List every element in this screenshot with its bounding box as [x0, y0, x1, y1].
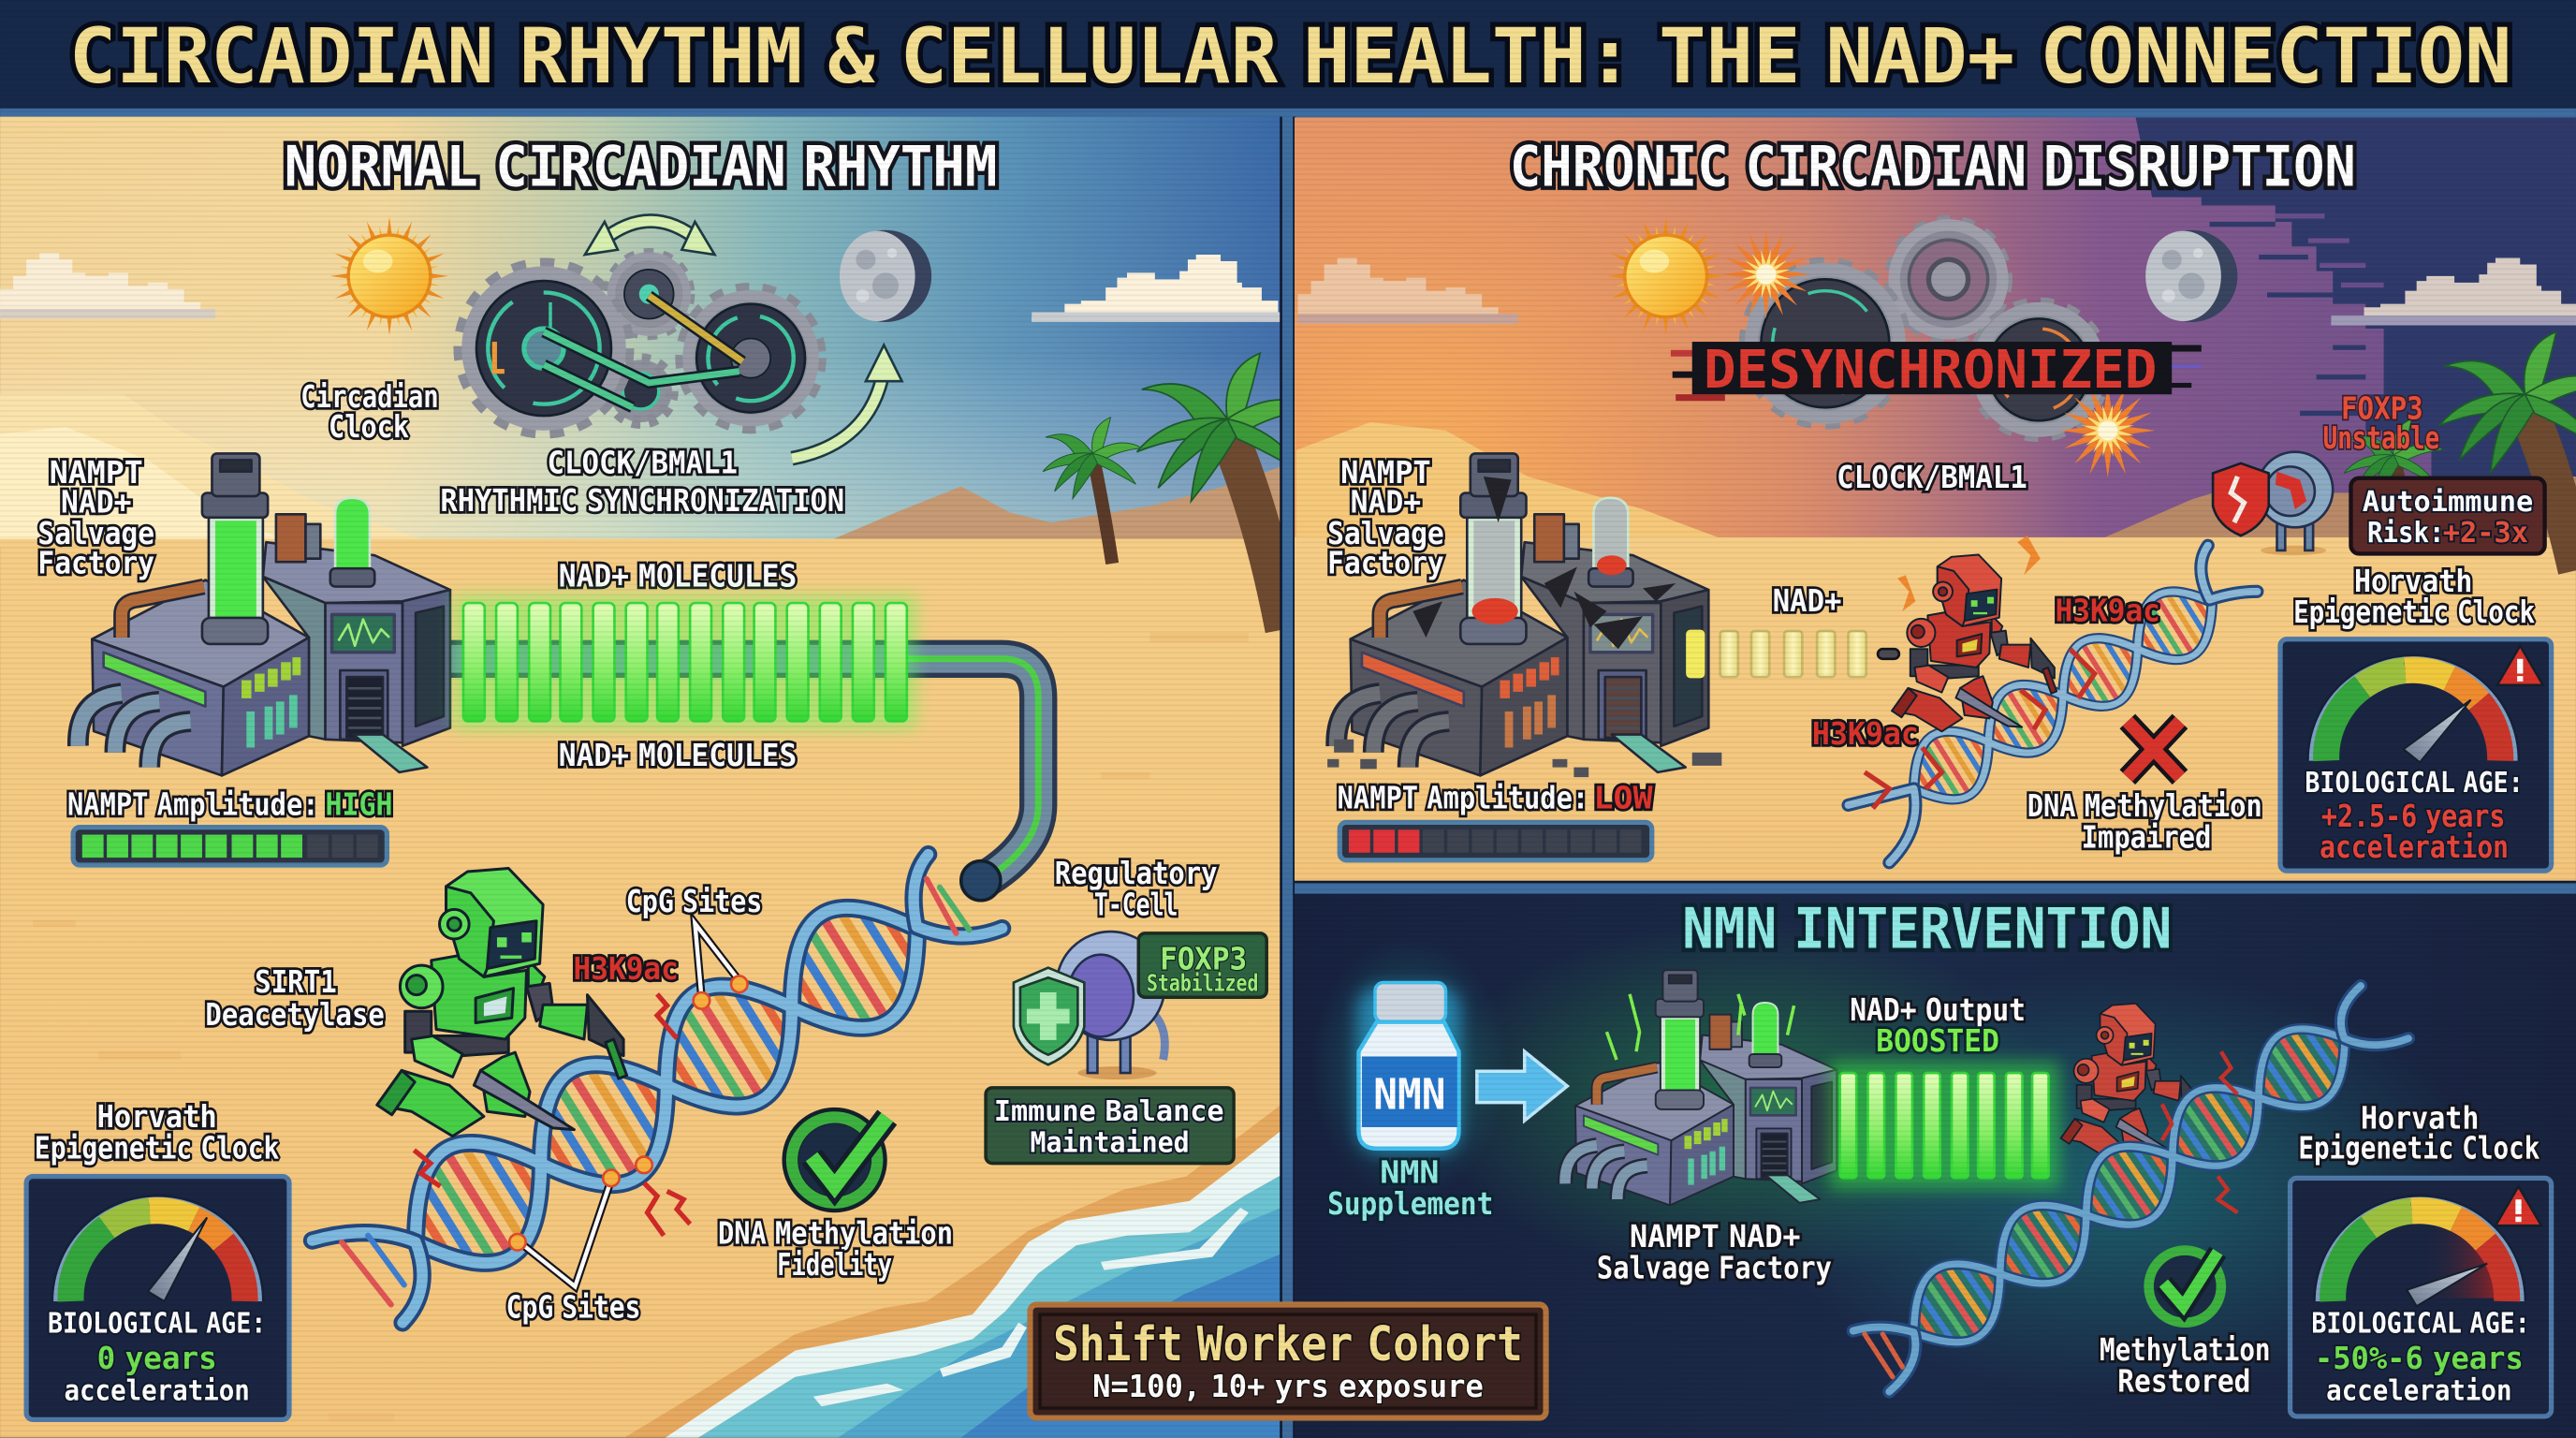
label: clock/bmal1: CLOCK/BMAL1 — [547, 444, 738, 480]
panel: NMN intervention — [1295, 894, 2576, 1438]
panel: normal circadian rhythm — [0, 117, 1318, 1438]
icon: moon — [2145, 230, 2237, 322]
icon: moon — [840, 230, 931, 322]
title: CIRCADIAN RHYTHM & CELLULAR HEALTH: THE NAD+ CONNECTION — [69, 13, 2511, 101]
label: DNA methylation fidelity: Fidelity — [777, 1246, 892, 1283]
gauge: biological age 0 years: acceleration — [65, 1374, 250, 1407]
robot: damaged — [1892, 554, 2056, 731]
label: regulatory T-cell — [1055, 855, 1218, 923]
spark top — [1721, 230, 1810, 318]
label: NMN supplement: NMN — [1380, 1154, 1439, 1191]
damage marks — [2162, 1051, 2237, 1212]
sky background — [0, 117, 1281, 547]
label: methylation restored: Methylation — [2100, 1331, 2271, 1368]
icon: NAD+ salvage factory — [78, 453, 450, 775]
label: SIRT1: Deacetylase — [205, 996, 385, 1033]
horizontal divider — [1295, 881, 2576, 894]
immune balance box: Immune Balance — [994, 1095, 1224, 1128]
panel: chronic circadian disruption — [1295, 117, 2576, 882]
NAMPT amplitude label: HIGH — [326, 785, 393, 822]
damage marks — [414, 994, 690, 1236]
icon: broken factory — [1327, 453, 1721, 777]
label: FOXP3 unstable: FOXP3 — [2341, 390, 2423, 427]
label: SIRT1: SIRT1 — [255, 963, 337, 1000]
DNA helix — [313, 855, 1003, 1323]
NAMPT amplitude bar low — [1339, 822, 1652, 860]
icon: NMN bottle: NMN — [1373, 1070, 1445, 1120]
label: regulatory T-cell: Regulatory — [1055, 855, 1218, 891]
label: NMN supplement: Supplement — [1327, 1185, 1493, 1222]
broken gears — [1749, 224, 2101, 433]
label: Horvath clock — [35, 1098, 279, 1166]
label: factory: Factory — [1327, 545, 1444, 581]
immune balance box — [986, 1088, 1234, 1164]
boosted NAD+ bars — [1830, 1062, 2060, 1190]
icon: green shield — [1014, 968, 1084, 1064]
icon: check — [790, 1116, 887, 1204]
robot: SIRT1 — [377, 869, 627, 1137]
label: factory: NAMPT — [50, 454, 143, 491]
gauge: biological age recovered — [2291, 1178, 2552, 1416]
label: NAMPT factory — [1597, 1218, 1832, 1285]
label: Horvath clock: Horvath — [97, 1098, 217, 1135]
frame divider vertical — [1280, 117, 1295, 1438]
icon: NMN bottle — [1357, 983, 1460, 1153]
label: clock/bmal1: CLOCK/BMAL1 — [1837, 459, 2027, 495]
gauge: biological age 0 years: BIOLOGICAL AGE: — [48, 1307, 266, 1340]
robot: recovering — [2061, 1004, 2203, 1156]
gauge: biological age 0 years — [26, 1177, 289, 1419]
label: Horvath clock: Horvath — [2361, 1100, 2479, 1137]
clouds — [1298, 258, 2576, 325]
FOXP3 stabilized box — [1138, 933, 1266, 997]
icon: recovered factory — [1565, 970, 1837, 1205]
navy background — [1295, 894, 2576, 1438]
label: clock/bmal1: RHYTHMIC SYNCHRONIZATION — [440, 482, 844, 519]
label: Horvath clock — [2293, 563, 2535, 630]
label: SIRT1 — [205, 963, 385, 1033]
label: Horvath clock: Epigenetic Clock — [35, 1129, 279, 1166]
label: factory: Salvage — [37, 515, 154, 551]
weak NAD+ bars — [1687, 631, 1899, 677]
label: factory: Salvage — [1327, 515, 1444, 551]
label: factory: NAD+ — [1351, 484, 1421, 521]
NAMPT amplitude bar high — [73, 828, 387, 865]
label: methylation impaired: DNA Methylation — [2027, 787, 2262, 824]
label: clock/bmal1 — [440, 444, 844, 519]
CpG pointers — [509, 923, 748, 1286]
label: factory: NAD+ — [61, 484, 131, 521]
gauge: biological age accelerated — [2280, 639, 2552, 871]
icon: T-cell — [1057, 932, 1164, 1079]
label: DNA methylation fidelity — [718, 1215, 953, 1283]
wet sand edge — [624, 1104, 1281, 1438]
dusk sky — [1295, 117, 2576, 548]
NAMPT amplitude label low: NAMPT Amplitude: — [1338, 779, 1588, 815]
damaged DNA — [1848, 546, 2257, 862]
icon: cracked shield — [2213, 463, 2269, 536]
label: factory — [37, 454, 154, 581]
label: methylation impaired: Impaired — [2082, 819, 2211, 856]
label: NAD+: NAD+ — [1773, 582, 1841, 619]
foam — [666, 1130, 1281, 1438]
dune — [2101, 477, 2576, 542]
label: CpG top: CpG Sites — [626, 883, 762, 919]
sparks on robot — [1897, 536, 2041, 611]
arrow: NMN to factory — [1477, 1051, 1567, 1121]
NAMPT amplitude label: NAMPT Amplitude: — [67, 785, 319, 822]
label: NAD+ output: BOOSTED — [1876, 1022, 1999, 1059]
FOXP3 stabilized box: Stabilized — [1147, 969, 1258, 996]
label: Horvath clock: Horvath — [2354, 563, 2472, 599]
ocean deep — [961, 1254, 1281, 1438]
autoimmune risk box: Autoimmune — [2363, 486, 2533, 519]
autoimmune risk box: +2-3x — [2443, 517, 2528, 550]
label: factory — [1327, 454, 1444, 581]
gauge: biological age recovered: acceleration — [2326, 1374, 2511, 1407]
NAD+ molecules label bottom: NAD+ MOLECULES — [559, 737, 797, 773]
desynchronized banner: DESYNCHRONIZED — [1704, 340, 2157, 401]
glow behind illustration — [1311, 920, 2481, 1397]
label: regulatory T-cell: T-Cell — [1094, 887, 1178, 923]
label: NAD+ output — [1850, 991, 2026, 1059]
gauge: biological age accelerated: acceleration — [2320, 829, 2509, 865]
ocean mid — [838, 1208, 1281, 1438]
icon: sun — [1606, 216, 1725, 336]
gauge: biological age recovered: BIOLOGICAL AGE: — [2311, 1307, 2530, 1340]
icon: unstable T-cell — [2257, 452, 2333, 555]
heading: NMN INTERVENTION — [1682, 898, 2172, 962]
callout: shift worker cohort — [1030, 1304, 1546, 1418]
callout: shift worker cohort: N=100, 10+ yrs exposure — [1092, 1368, 1484, 1404]
label: H3K9ac: H3K9ac — [574, 950, 679, 987]
label: NMN supplement — [1327, 1154, 1493, 1222]
clouds — [0, 253, 1281, 322]
NAMPT amplitude label low: LOW — [1593, 779, 1654, 815]
label: circadian clock: Clock — [329, 408, 409, 445]
label: DNA methylation fidelity: DNA Methylation — [718, 1215, 953, 1252]
arrow: curved to moon — [792, 345, 902, 459]
FOXP3 stabilized box: FOXP3 — [1160, 940, 1247, 976]
label: NAD+ output: NAD+ Output — [1850, 991, 2026, 1028]
pipe to DNA — [420, 659, 1038, 901]
label: NAMPT factory: Salvage Factory — [1597, 1249, 1832, 1285]
palm large — [2439, 332, 2576, 570]
icon: sun — [329, 216, 449, 336]
NAD+ molecule bars — [453, 594, 916, 729]
label: FOXP3 unstable: Unstable — [2323, 419, 2439, 456]
label: H3K9ac upper: H3K9ac — [2056, 592, 2160, 628]
label: circadian clock: Circadian — [300, 378, 439, 415]
icon: red X — [2128, 721, 2180, 777]
gauge: biological age recovered: -50%-6 years — [2315, 1340, 2524, 1376]
label: FOXP3 unstable — [2323, 390, 2439, 456]
palm large — [1137, 353, 1318, 629]
gauge: biological age accelerated: +2.5-6 years — [2321, 798, 2505, 834]
sand — [1295, 537, 2576, 882]
gauge: biological age 0 years: 0 years — [97, 1340, 217, 1376]
restored DNA — [1853, 986, 2408, 1392]
label: factory: Factory — [37, 545, 154, 581]
label: methylation impaired — [2027, 787, 2262, 856]
mountains — [818, 466, 1281, 546]
spark bottom — [2060, 383, 2155, 477]
heading: NORMAL CIRCADIAN RHYTHM — [285, 135, 997, 199]
palm small — [1043, 418, 1142, 564]
palm small — [2344, 419, 2443, 500]
icon: check — [2149, 1251, 2221, 1323]
label: CpG bottom: CpG Sites — [506, 1289, 641, 1326]
label: H3K9ac lower: H3K9ac — [1812, 715, 1919, 752]
autoimmune risk box — [2351, 478, 2545, 553]
sand patches — [33, 633, 1249, 1421]
label: factory: NAMPT — [1340, 454, 1431, 491]
header bar — [0, 0, 2576, 117]
arrow: top double arrow — [585, 221, 714, 255]
energy sparks — [1606, 994, 1794, 1060]
autoimmune risk box: Risk: — [2367, 517, 2445, 550]
ocean shallow — [698, 1175, 1281, 1438]
sand — [0, 539, 1281, 1438]
label: circadian clock — [300, 378, 439, 445]
callout: shift worker cohort: Shift Worker Cohort — [1053, 1317, 1523, 1372]
gauge: biological age accelerated: BIOLOGICAL AGE: — [2305, 767, 2524, 800]
gears: circadian clock — [465, 255, 816, 427]
immune balance box: Maintained — [1030, 1126, 1190, 1159]
NAD+ molecules label top: NAD+ MOLECULES — [559, 558, 797, 594]
heading: CHRONIC CIRCADIAN DISRUPTION — [1510, 135, 2356, 199]
label: methylation restored — [2100, 1331, 2271, 1400]
label: methylation restored: Restored — [2117, 1363, 2250, 1400]
label: NAMPT factory: NAMPT NAD+ — [1630, 1218, 1801, 1255]
label: Horvath clock — [2298, 1100, 2539, 1166]
